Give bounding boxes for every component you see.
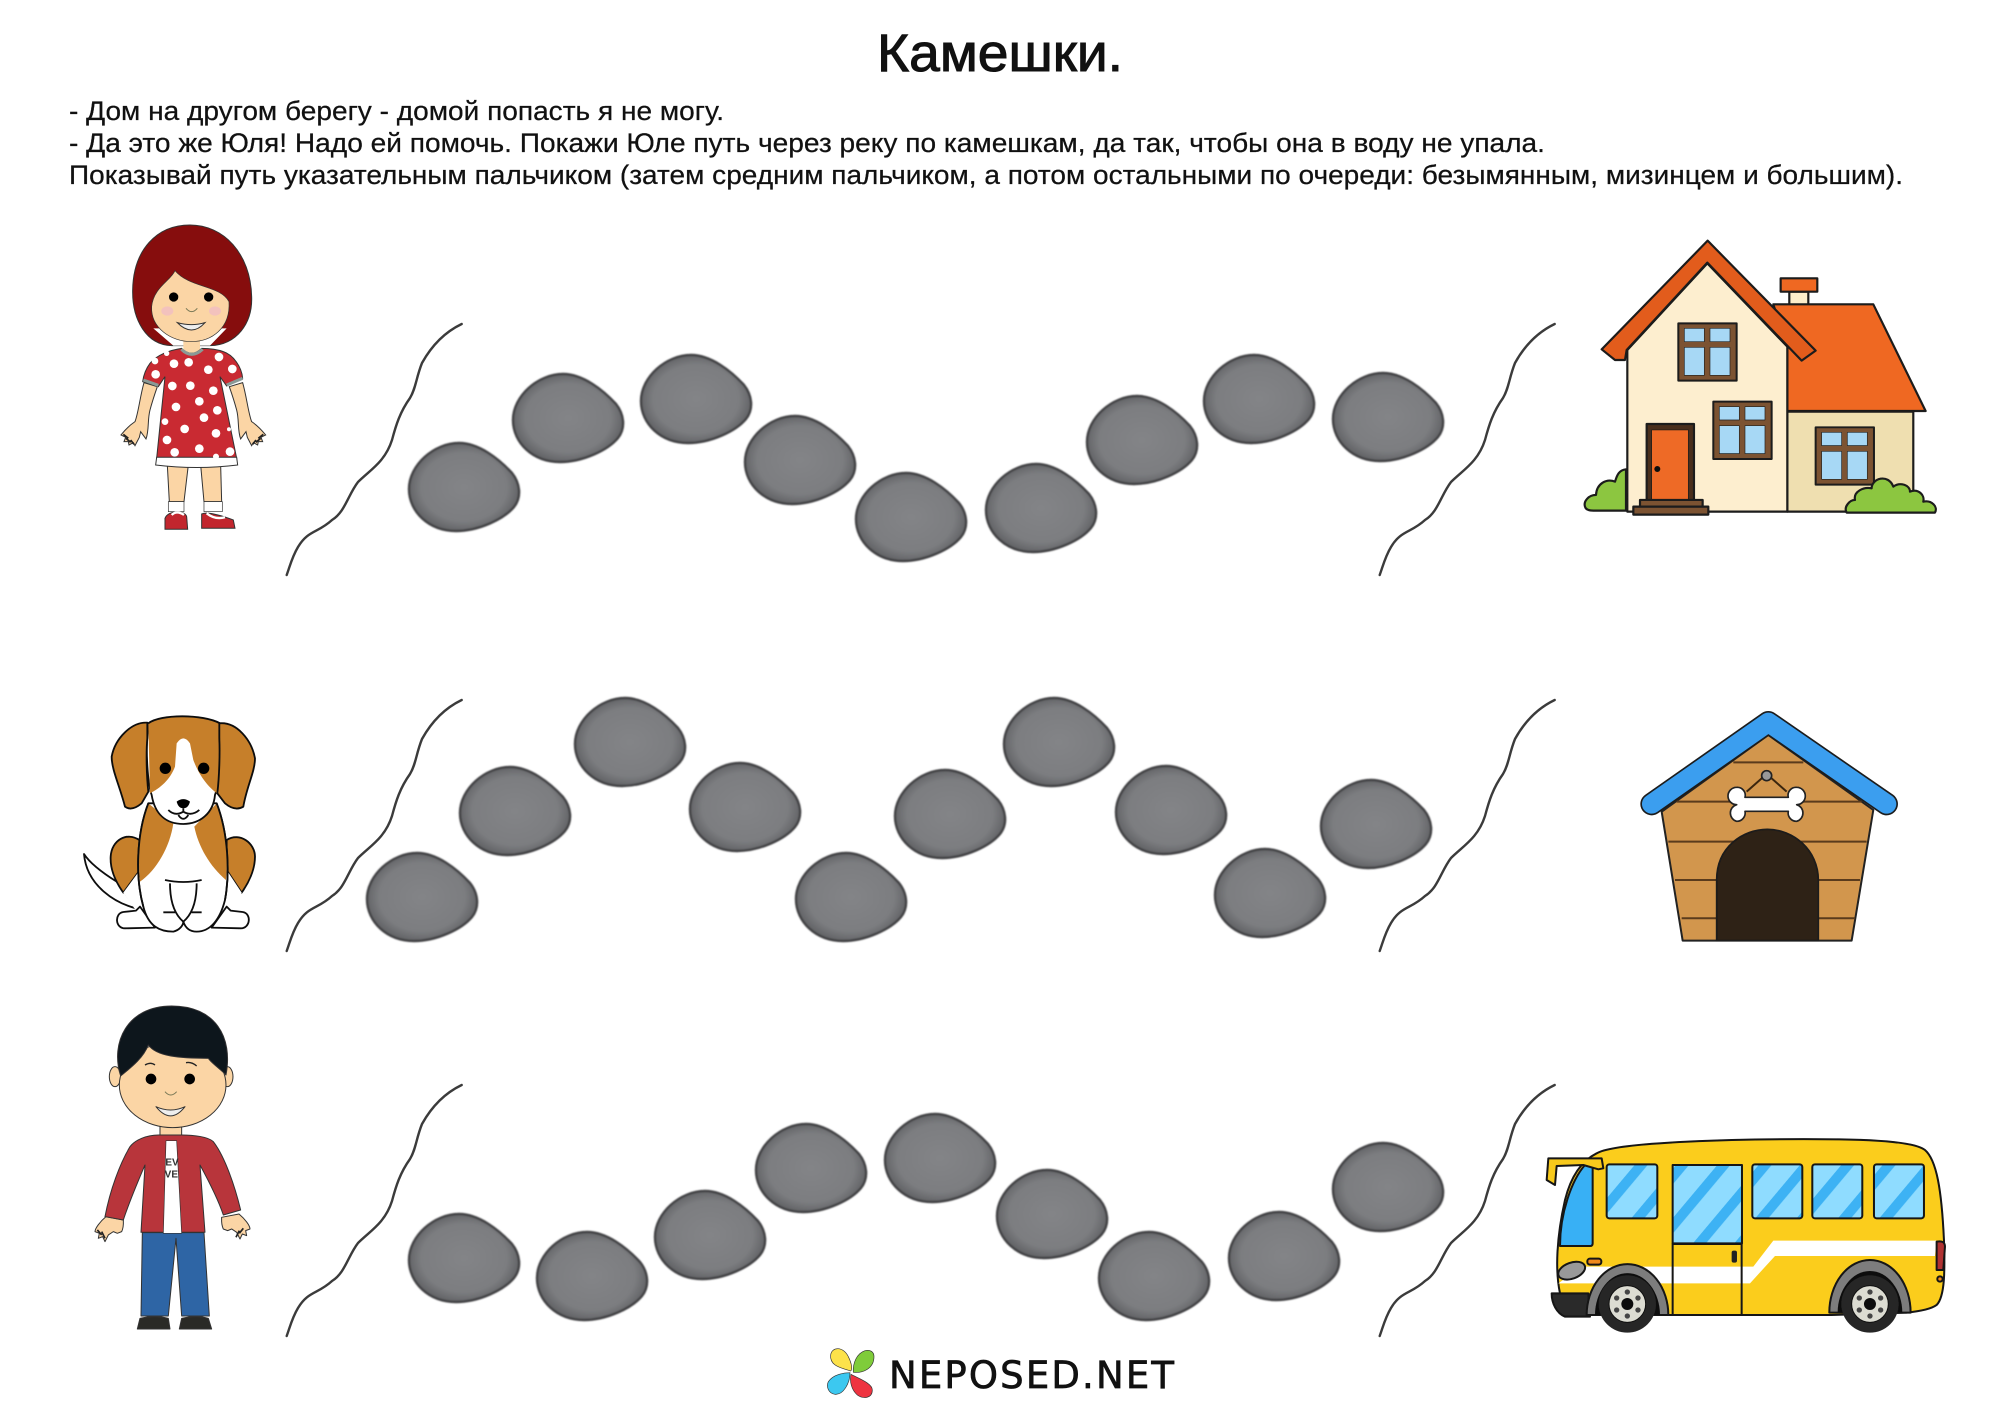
left river bank — [287, 700, 462, 951]
left river bank — [287, 324, 462, 575]
logo: NEPOSED.NET — [827, 1349, 1174, 1398]
instructions text: - Да это же Юля! Надо ей помочь. Покажи Юле путь через реку по камешкам, да так, чтобы она в воду не упала. — [69, 128, 1545, 158]
icon: dog — [84, 716, 255, 932]
stones row 3 — [409, 1114, 1443, 1320]
logo flower icon — [827, 1349, 874, 1398]
row 2: river with stones — [287, 698, 1555, 951]
instructions text: Показывай путь указательным пальчиком (затем средним пальчиком, а потом остальными по очереди: безымянным, мизинцем и большим). — [69, 160, 1903, 190]
instructions text — [69, 96, 1903, 190]
icon: girl in red polka-dot dress — [121, 225, 266, 529]
title: Камешки. — [877, 24, 1123, 83]
icon: boy in red jacket: EV — [165, 1158, 179, 1169]
stones row 2 — [367, 698, 1431, 941]
right river bank — [1380, 1085, 1555, 1336]
logo wordmark: NEPOSED.NET — [889, 1354, 1174, 1397]
icon: dog house — [1652, 722, 1887, 941]
icon: house — [1585, 241, 1936, 515]
left river bank — [287, 1085, 462, 1336]
stones row 1 — [409, 355, 1443, 561]
row 1: river with stones — [287, 324, 1555, 575]
icon: yellow bus — [1547, 1139, 1945, 1333]
icon: boy in red jacket: VE — [165, 1170, 178, 1181]
right river bank — [1380, 700, 1555, 951]
row 3: river with stones — [287, 1085, 1555, 1336]
right river bank — [1380, 324, 1555, 575]
icon: boy in red jacket — [95, 1006, 250, 1329]
instructions text: - Дом на другом берегу - домой попасть я не могу. — [69, 96, 724, 126]
